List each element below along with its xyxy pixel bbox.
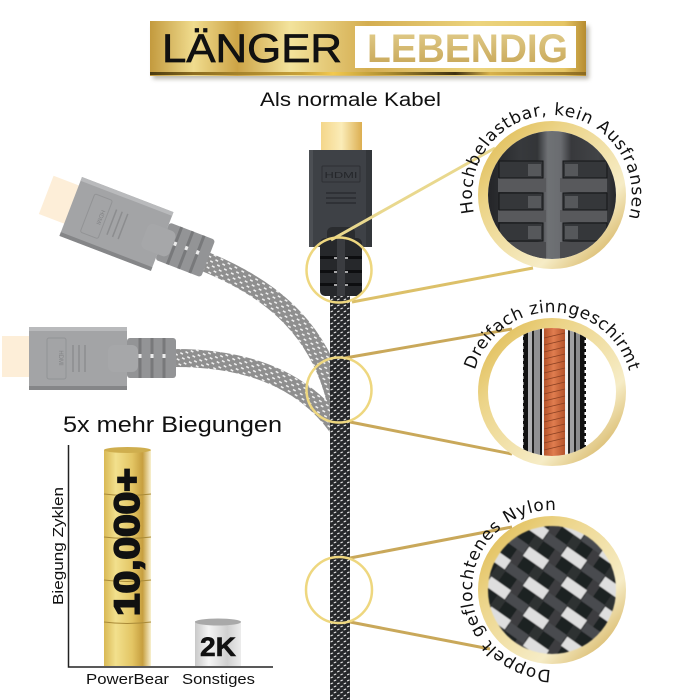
silver bar: 2K	[200, 632, 237, 662]
y axis title: Biegung Zyklen	[50, 487, 67, 605]
curved label: Dreifach: Dreifach zinngeschirmt	[464, 300, 640, 371]
small ring: cable bend	[306, 358, 372, 422]
zoom circle: strain relief	[478, 121, 626, 269]
zoom circle: shielding	[478, 318, 626, 466]
silver bar	[195, 618, 241, 666]
lower gray connector: HDMI	[57, 350, 63, 366]
black connector: HDMI	[324, 171, 358, 180]
vertical braided cable	[330, 296, 350, 700]
upper gray cable bent	[206, 262, 337, 402]
curved label: Doppelt geflochtenes: Doppelt geflochtenes Nylon	[460, 500, 554, 682]
white label box	[355, 26, 576, 68]
gold bar: 10,000+	[108, 468, 147, 616]
small ring: connector strain relief	[306, 238, 372, 302]
zoom circle: braid	[478, 516, 626, 664]
bar chart	[50, 445, 273, 688]
gold bar	[104, 447, 151, 666]
small ring: braid	[306, 557, 372, 623]
axes	[68, 445, 273, 667]
chart heading: 5x mehr Biegungen	[63, 412, 282, 437]
lower gray cable bent	[175, 358, 338, 428]
subtitle: Als normale Kabel	[260, 90, 441, 111]
black connector	[309, 122, 372, 296]
curved label: Hochbelastbar: Hochbelastbar, kein Ausfransen	[460, 102, 642, 218]
title banner	[150, 21, 589, 79]
heading: Lebendig: LEBENDIG	[367, 27, 568, 71]
category label PowerBear: PowerBear	[86, 672, 169, 688]
category label Sonstiges: Sonstiges	[182, 672, 255, 688]
upper gray connector	[34, 167, 219, 288]
upper gray connector: HDMI	[94, 209, 105, 226]
lower gray connector	[2, 327, 176, 390]
leader lines to zoom circles	[331, 148, 533, 649]
heading: Länger: LÄNGER	[162, 27, 342, 71]
